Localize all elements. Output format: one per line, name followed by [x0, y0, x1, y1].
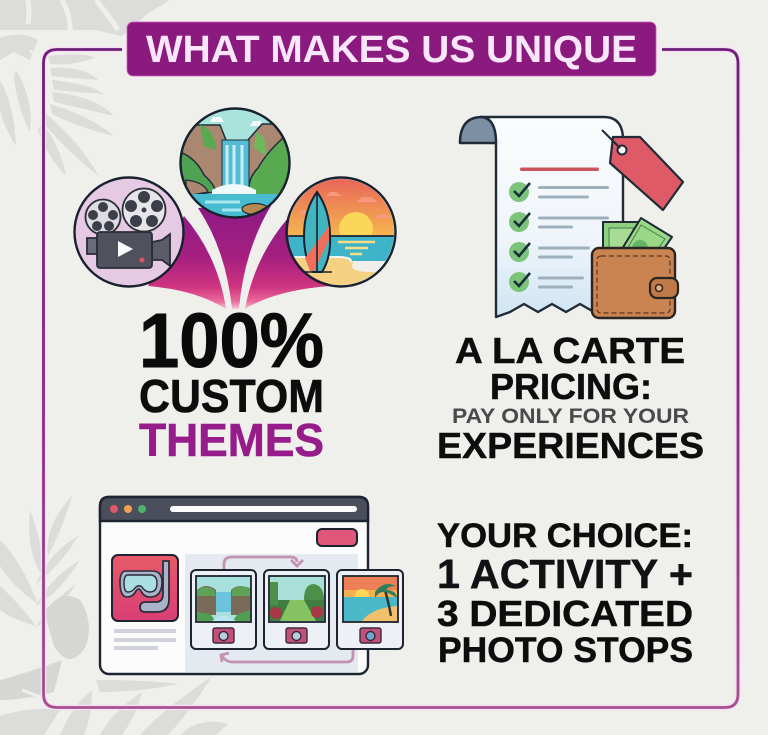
- heading: pricing: PRICING:: [490, 366, 652, 407]
- subheading: pay only for your: PAY ONLY FOR YOUR: [452, 405, 689, 428]
- icon: beach surfboard circle: [286, 178, 396, 290]
- heading: experiences: EXPERIENCES: [437, 425, 704, 466]
- palm leaves: bottom left: [0, 496, 228, 735]
- funnel shapes: [148, 204, 330, 309]
- arrow: forward loop: [224, 557, 303, 570]
- photo card: jungle path: [264, 570, 329, 649]
- icon: browser window: [100, 497, 368, 674]
- panel: a la carte pricing: [437, 117, 704, 466]
- label: custom: CUSTOM: [139, 370, 324, 422]
- heading: your choice: YOUR CHOICE:: [437, 517, 693, 555]
- icon: receipt: [460, 117, 623, 317]
- heading: a la carte: A LA CARTE: [455, 330, 685, 371]
- icon: price tag: [602, 130, 683, 210]
- stat: 100%: 100%: [139, 298, 324, 384]
- icon: waterfall circle: [180, 108, 292, 224]
- label: themes: THEMES: [139, 414, 324, 466]
- title banner: WHAT MAKES US UNIQUE: [146, 29, 637, 71]
- heading: 1 activity +: 1 ACTIVITY +: [437, 551, 693, 597]
- panel: custom themes: [74, 108, 396, 466]
- heading: 3 dedicated: 3 DEDICATED: [437, 593, 693, 634]
- panel: activity and photo stops: [100, 497, 693, 674]
- photo card: beach palm: [337, 570, 403, 649]
- heading: photo stops: PHOTO STOPS: [438, 631, 693, 670]
- photo card: waterfall: [191, 570, 256, 649]
- arrow: return loop: [221, 650, 353, 662]
- icon: snorkel mask tile: [112, 555, 178, 621]
- palm leaves: top left: [0, 0, 170, 176]
- icon: movie camera circle: [74, 178, 184, 286]
- icon: wallet with cash: [592, 218, 678, 318]
